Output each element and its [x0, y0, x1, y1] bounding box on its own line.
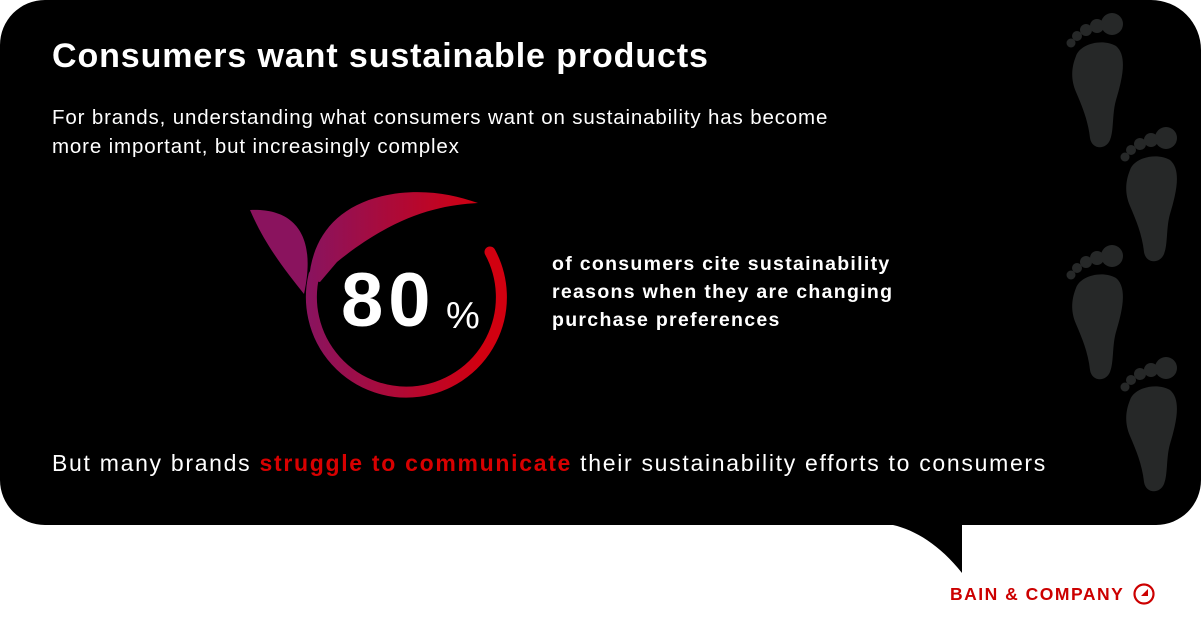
footprints decoration	[1066, 13, 1177, 492]
logo: Bain & Company: BAIN & COMPANY	[950, 584, 1124, 604]
stat description: of consumers cite sustainability	[552, 253, 891, 275]
icon: leaf circle with 80%: %	[446, 295, 480, 337]
subtitle: For brands, understanding what consumers want on sustainability has become	[52, 106, 828, 129]
bottom statement: But many brands struggle to communicate their sustainability efforts to consumers	[52, 450, 1047, 476]
icon: leaf circle with 80%	[250, 192, 507, 398]
stat description: reasons when they are changing	[552, 281, 893, 303]
icon: leaf circle with 80%: 80	[341, 258, 436, 343]
title: Consumers want sustainable products	[52, 37, 709, 75]
subtitle	[52, 106, 828, 158]
stat description: purchase preferences	[552, 309, 781, 331]
subtitle: more important, but increasingly complex	[52, 135, 460, 158]
stat description	[552, 253, 893, 331]
